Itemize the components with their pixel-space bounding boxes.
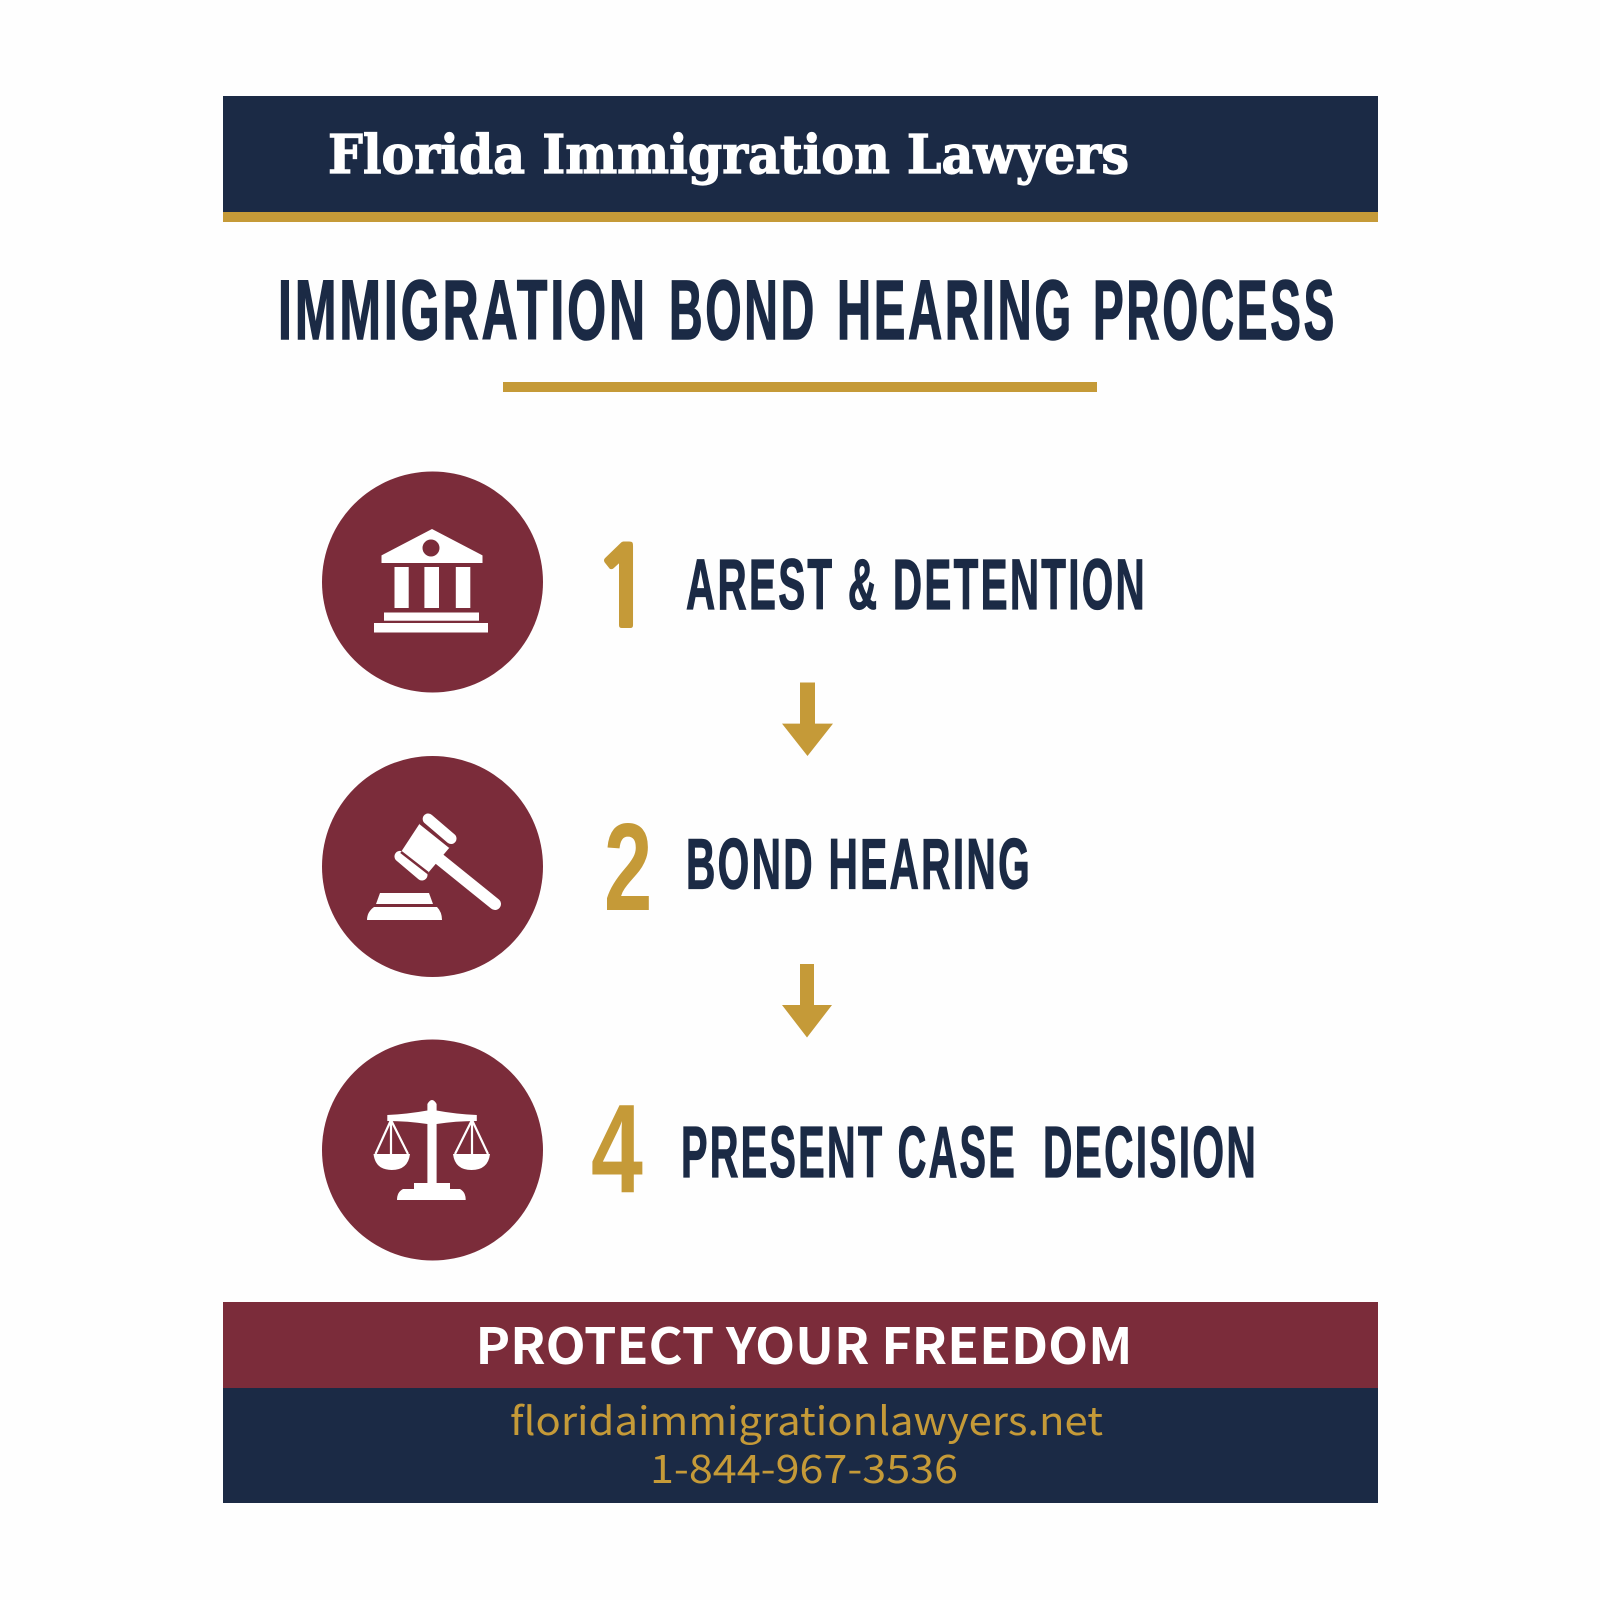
step 4 row [322, 1040, 1258, 1260]
main title: BOND [669, 263, 817, 357]
footer call to action panel [223, 1302, 1378, 1388]
step label: present case decision: DECISION [1043, 1113, 1258, 1193]
step label: arrest and detention: AREST & DETENTION [686, 546, 1147, 625]
header firm name: Florida Immigration Lawyers [328, 124, 1129, 186]
step label: bond hearing: BOND HEARING [686, 826, 1032, 904]
arrow: step 2 to 4 [782, 964, 832, 1038]
arrow: step 1 to 2 [782, 682, 833, 756]
step number 4: 4 [591, 1079, 643, 1219]
title underline [503, 382, 1097, 392]
step label: present case decision: PRESENT CASE [681, 1113, 1017, 1193]
main title [278, 263, 1337, 357]
main title: IMMIGRATION [278, 263, 648, 357]
header banner [223, 96, 1378, 222]
main title: HEARING [837, 263, 1074, 357]
main title: PROCESS [1093, 263, 1337, 357]
website: floridaimmigrationlawyers.net [510, 1391, 1103, 1447]
step number 1: 1 [592, 534, 655, 642]
footer contact panel [223, 1388, 1378, 1503]
icon: courthouse [322, 472, 543, 692]
step 2 row [322, 756, 1032, 977]
icon: gavel [322, 756, 543, 977]
icon: scales of justice [322, 1040, 543, 1260]
call to action text: PROTECT YOUR FREEDOM [476, 1307, 1132, 1379]
step 1 row [322, 472, 1147, 692]
phone number: 1-844-967-3536 [650, 1439, 958, 1495]
step number 2: 2 [604, 798, 652, 937]
